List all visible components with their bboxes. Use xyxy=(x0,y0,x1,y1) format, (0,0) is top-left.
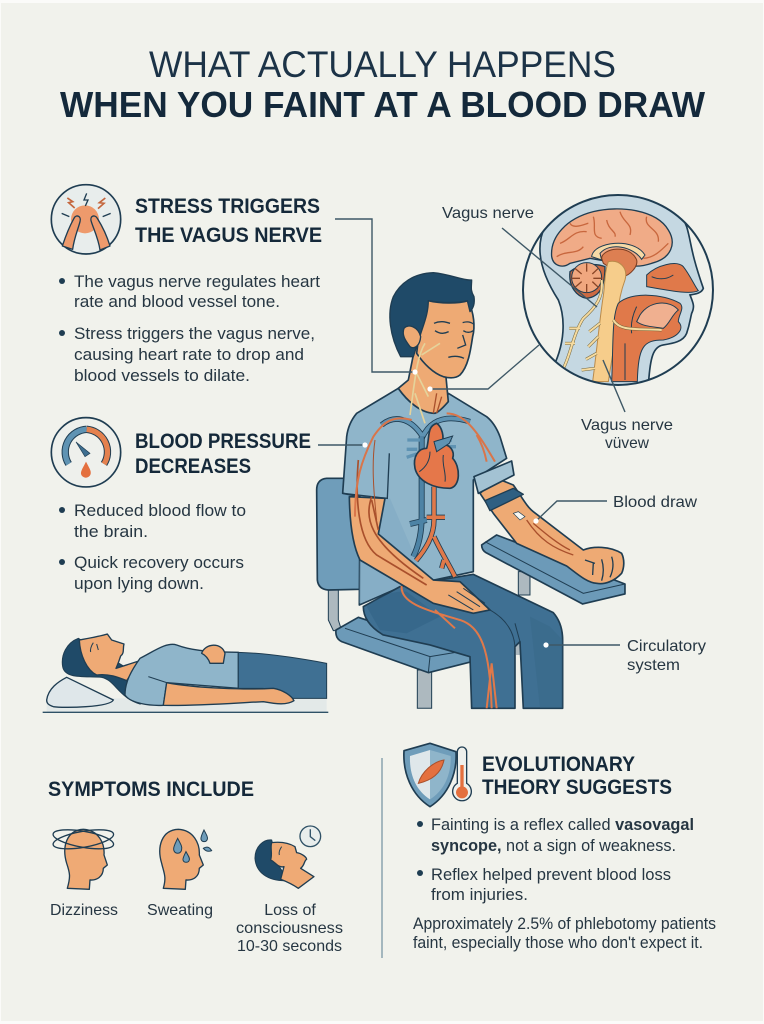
icon: pressure gauge xyxy=(51,418,121,487)
label: circulatory system xyxy=(627,638,706,674)
arm on lap xyxy=(349,460,490,613)
icon: dizziness xyxy=(52,826,115,889)
label: vagus nerve view: Vagus nerve xyxy=(581,417,673,434)
bullet list: blood pressure: Quick recovery occurs xyxy=(74,554,244,572)
title: WHEN YOU FAINT AT A BLOOD DRAW xyxy=(60,84,705,125)
symptom labels: Dizziness xyxy=(50,902,118,919)
symptom labels: consciousness xyxy=(236,920,343,937)
text: fainting statistic: Approximately 2.5% of phlebotomy patients xyxy=(413,915,716,933)
label: vagus nerve view: vüvew xyxy=(605,435,649,452)
icon: shield and thermometer xyxy=(404,743,471,807)
bullet list: evolutionary theory: from injuries. xyxy=(431,886,528,904)
bullet list: evolutionary theory xyxy=(417,816,694,904)
bullet list: blood pressure xyxy=(59,502,246,593)
panel: evolutionary theory xyxy=(404,743,716,952)
bullet list: vagus nerve: blood vessels to dilate. xyxy=(74,367,250,385)
symptom labels xyxy=(50,902,343,955)
heading: stress triggers: THE VAGUS NERVE xyxy=(135,224,322,247)
panel: blood pressure decreases xyxy=(51,418,311,593)
illustration: heart and vessels xyxy=(355,413,495,577)
bullet list: vagus nerve: The vagus nerve regulates heart xyxy=(74,273,320,291)
heading: stress triggers: STRESS TRIGGERS xyxy=(135,195,320,218)
heading: blood pressure xyxy=(135,430,311,478)
bullet list: vagus nerve: Stress triggers the vagus nerve, xyxy=(74,325,315,343)
chair xyxy=(317,478,625,708)
bullet list: vagus nerve xyxy=(59,273,320,385)
raised arm with cuff xyxy=(474,461,624,584)
heading: stress triggers xyxy=(135,195,322,247)
panel: stress triggers the vagus nerve xyxy=(51,185,322,385)
bullet list: evolutionary theory: syncope, not a sign of weakness. xyxy=(431,837,676,855)
panel: symptoms xyxy=(48,778,343,955)
illustration: patient head and neck xyxy=(390,273,474,423)
label: vagus nerve view xyxy=(581,417,673,452)
bullet list: blood pressure: Reduced blood flow to xyxy=(74,502,246,520)
heading: symptoms include: SYMPTOMS INCLUDE xyxy=(48,778,254,801)
heading: blood pressure: DECREASES xyxy=(135,455,251,478)
callout lines and dots xyxy=(318,219,625,648)
title: WHAT ACTUALLY HAPPENS xyxy=(149,44,616,85)
heading: evolutionary theory: THEORY SUGGESTS xyxy=(482,776,672,799)
heading: evolutionary theory xyxy=(482,753,672,799)
icon: loss of consciousness xyxy=(255,826,321,888)
illustration: brain cross-section inset xyxy=(523,187,713,387)
heading: blood pressure: BLOOD PRESSURE xyxy=(135,430,311,453)
bullet list: blood pressure: the brain. xyxy=(74,523,148,541)
label: vagus nerve: Vagus nerve xyxy=(442,205,534,222)
heading: evolutionary theory: EVOLUTIONARY xyxy=(482,753,635,776)
leg vessel xyxy=(402,586,497,708)
trousers xyxy=(363,574,563,708)
label: circulatory system: Circulatory xyxy=(627,638,706,655)
icon: sweating xyxy=(160,829,212,889)
illustration: person lying down xyxy=(43,634,328,712)
bullet list: evolutionary theory: Fainting is a reflex called vasovagal xyxy=(431,816,694,834)
text: fainting statistic: faint, especially those who don't expect it. xyxy=(413,934,703,952)
symptom labels: Sweating xyxy=(147,902,213,919)
text: fainting statistic xyxy=(413,915,716,952)
symptom labels: Loss of xyxy=(264,902,316,919)
title xyxy=(60,44,705,125)
bullet list: vagus nerve: rate and blood vessel tone. xyxy=(74,293,280,311)
icon: stressed head xyxy=(51,185,121,254)
label: blood draw: Blood draw xyxy=(613,494,697,511)
symptom labels: 10-30 seconds xyxy=(237,938,342,955)
shirt xyxy=(343,388,507,605)
illustration: seated patient with circulatory system xyxy=(317,388,625,708)
bullet list: evolutionary theory: Reflex helped prevent blood loss xyxy=(431,866,671,884)
label: circulatory system: system xyxy=(627,657,680,674)
bullet list: vagus nerve: causing heart rate to drop and xyxy=(74,346,304,364)
bullet list: blood pressure: upon lying down. xyxy=(74,575,204,593)
